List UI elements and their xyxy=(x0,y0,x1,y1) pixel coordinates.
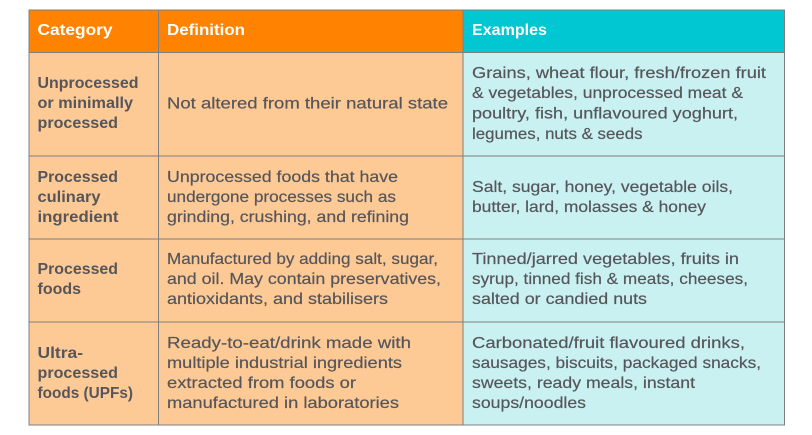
definition: Unprocessed foods that have xyxy=(167,169,398,186)
examples xyxy=(472,335,761,412)
header: Category: Category xyxy=(38,22,113,39)
definition: manufactured in laboratories xyxy=(167,395,399,412)
definition: and oil. May contain preservatives, xyxy=(167,271,441,288)
examples: butter, lard, molasses & honey xyxy=(472,199,706,216)
examples: poultry, fish, unflavoured yoghurt, xyxy=(472,106,738,122)
definition: grinding, crushing, and refining xyxy=(167,209,409,226)
examples: syrup, tinned fish & meats, cheeses, xyxy=(472,271,748,288)
category label xyxy=(38,261,118,298)
definition xyxy=(167,251,441,308)
category label xyxy=(38,75,138,132)
examples xyxy=(472,179,733,216)
definition: Not altered from their natural state xyxy=(167,96,448,112)
definition xyxy=(167,169,409,226)
category label: processed xyxy=(38,115,118,132)
row 2: processed culinary ingredient xyxy=(38,169,733,226)
category label: ingredient xyxy=(38,209,119,226)
row 1: unprocessed or minimally processed xyxy=(38,65,767,143)
examples: legumes, nuts & seeds xyxy=(472,126,642,143)
definition: undergone processes such as xyxy=(167,189,396,206)
examples: Salt, sugar, honey, vegetable oils, xyxy=(472,179,733,196)
examples: salted or candied nuts xyxy=(472,291,647,308)
category label: foods xyxy=(38,281,81,298)
examples xyxy=(472,65,767,143)
category label: foods (UPFs) xyxy=(38,385,133,402)
definition: Manufactured by adding salt, sugar, xyxy=(167,251,438,268)
examples: soups/noodles xyxy=(472,395,586,412)
category label xyxy=(38,345,133,402)
category label: Processed xyxy=(38,261,118,278)
header: Examples: Examples xyxy=(472,22,547,39)
category label: or minimally xyxy=(38,95,133,112)
examples xyxy=(472,251,748,308)
examples: & vegetables, unprocessed meat & xyxy=(472,85,743,102)
header: Definition: Definition xyxy=(167,22,245,39)
examples: Carbonated/fruit flavoured drinks, xyxy=(472,335,745,352)
definition: multiple industrial ingredients xyxy=(167,355,402,372)
category label: culinary xyxy=(38,189,101,206)
category label: Ultra- xyxy=(38,345,83,362)
category label: Unprocessed xyxy=(38,75,138,92)
category label: Processed xyxy=(38,169,118,186)
category label: processed xyxy=(38,365,118,382)
examples: sausages, biscuits, packaged snacks, xyxy=(472,355,761,372)
examples: Grains, wheat flour, fresh/frozen fruit xyxy=(472,65,767,82)
examples: Tinned/jarred vegetables, fruits in xyxy=(472,251,739,268)
definition: Ready-to-eat/drink made with xyxy=(167,335,411,352)
category label xyxy=(38,169,119,226)
header row xyxy=(29,10,785,52)
definition: antioxidants, and stabilisers xyxy=(167,291,388,308)
definition xyxy=(167,335,411,412)
examples: sweets, ready meals, instant xyxy=(472,375,696,392)
row 3: processed foods xyxy=(38,251,748,308)
row 4: ultra-processed foods xyxy=(38,335,761,412)
definition: extracted from foods or xyxy=(167,375,357,392)
